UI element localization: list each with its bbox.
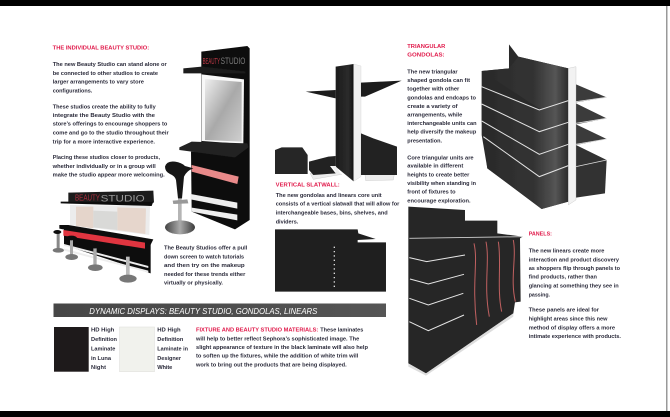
text block: triangular gondolas: together with other	[407, 87, 460, 93]
illustration: long beauty studio bar with four stools: BEAUTY	[75, 194, 101, 203]
illustration: slatwall close-up	[275, 229, 386, 292]
label: designer white: Definition	[157, 337, 184, 343]
text block: panels: passing.	[529, 292, 550, 298]
text block: triangular gondolas: create a variety of	[407, 104, 458, 110]
bottom black bar	[0, 411, 670, 417]
heading: triangular gondolas	[407, 44, 445, 59]
text block: intro: be connected to other studios to create	[53, 71, 158, 77]
illustration: single beauty studio tower with stool: STUDIO	[221, 56, 245, 66]
text block: integration: come and go to the studio throughout their	[53, 130, 169, 136]
banner: dynamic displays: DYNAMIC DISPLAYS: BEAUTY STUDIO, GONDOLAS, LINEARS	[89, 306, 318, 316]
text block: pull down screen: down screen to watch tutorials	[164, 254, 244, 260]
text block: fixture and beauty studio materials: These laminates	[320, 328, 363, 334]
swatch: designer white laminate	[120, 327, 154, 372]
text block: integration	[53, 104, 169, 145]
text block: triangular gondolas: front of fixtures to	[407, 190, 456, 196]
text block: triangular gondolas: Core triangular units are	[407, 155, 474, 161]
text block: integration: trip for a more interactive experience.	[53, 139, 155, 145]
text block: triangular gondolas: presentation.	[407, 138, 442, 144]
label: luna night: HD High	[91, 328, 115, 334]
illustration: long beauty studio bar with four stools	[53, 191, 154, 283]
illustration: long beauty studio bar with four stools: STUDIO	[101, 193, 145, 203]
text block: vertical slatwall description: consists of a vertical slatwall that will allow for	[276, 202, 400, 208]
text block: triangular gondolas: visibility when standing in	[407, 181, 476, 187]
text block: triangular gondolas: encourage exploration.	[407, 198, 471, 204]
illustration: single beauty studio tower with stool	[165, 46, 250, 234]
text block: triangular gondolas	[407, 44, 477, 204]
text block: pull down screen	[164, 246, 248, 287]
text block: placement: Placing these studios closer to products,	[53, 155, 160, 161]
illustration: triangular gondola	[482, 44, 607, 209]
label: luna night: in Luna	[91, 356, 112, 362]
text block: triangular gondolas: help diversify the makeup	[407, 130, 477, 136]
banner: dynamic displays	[54, 304, 386, 317]
swatch: luna night laminate	[54, 327, 89, 372]
text block: fixture and beauty studio materials: will help to better reflect Sephora’s sophisticated image. The	[195, 336, 359, 342]
text block: panels: glancing at something they see in	[529, 283, 619, 289]
text block: panels: method of display offers a more	[529, 325, 615, 331]
text block: intro: The new Beauty Studio can stand alone or	[53, 62, 167, 68]
text block: panels: find products, rather than	[529, 275, 598, 281]
heading: triangular gondolas: GONDOLAS:	[407, 53, 445, 59]
heading: triangular gondolas: TRIANGULAR	[407, 44, 445, 50]
text block: placement: whether individually or in a group will	[52, 164, 156, 170]
label: designer white: Designer	[157, 356, 182, 362]
label: designer white: White	[157, 365, 172, 371]
text block: placement: make the studio appear more welcoming.	[53, 173, 165, 179]
text block: pull down screen: The Beauty Studios offer a pull	[164, 246, 248, 252]
text block: integration: integrate the Beauty Studio with the	[53, 113, 155, 119]
text block: triangular gondolas: interchangeable units can	[407, 121, 477, 127]
label: luna night	[91, 328, 118, 371]
top black bar	[0, 0, 670, 6]
label: luna night: Laminate	[91, 347, 115, 353]
heading: vertical slatwall: VERTICAL SLATWALL:	[276, 183, 340, 189]
text block: panels: highlight areas since this new	[529, 317, 608, 323]
label: luna night: Night	[91, 365, 106, 371]
illustration: exploded vertical slatwall gondola	[275, 64, 402, 181]
text block: triangular gondolas: shaped gondola can fit	[407, 78, 470, 84]
text block: panels	[529, 232, 621, 340]
text block: triangular gondolas: available in different	[407, 164, 463, 170]
text block: vertical slatwall description: The new gondolas and linears core unit	[276, 193, 382, 199]
text block: fixture and beauty studio materials: work to bring out the products that are being displayed.	[195, 362, 347, 368]
text block: triangular gondolas: The new triangular	[407, 69, 458, 75]
illustration: single beauty studio tower with stool: BEAUTY	[203, 56, 220, 66]
label: designer white	[157, 328, 189, 371]
panel: individual beauty studio text	[52, 46, 169, 179]
text block: fixture and beauty studio materials: FIXTURE AND BEAUTY STUDIO MATERIALS:	[196, 328, 318, 334]
text block: intro	[53, 62, 167, 94]
text block: intro: configurations.	[53, 88, 93, 94]
illustration: linear gondola with panels	[408, 207, 523, 376]
label: luna night: Definition	[91, 337, 118, 343]
text block: vertical slatwall description: dividers.	[276, 219, 299, 225]
text block: triangular gondolas: heights to create better	[407, 172, 470, 178]
text block: panels: as shoppers flip through panels to	[529, 266, 620, 272]
text block: triangular gondolas: arrangements, while	[407, 112, 462, 118]
label: designer white: HD High	[157, 328, 181, 334]
label: designer white: Laminate in	[157, 347, 189, 353]
text block: panels: intimate experience with products.	[529, 334, 621, 340]
text block: panels: interaction and product discovery	[529, 257, 620, 263]
text block: fixture and beauty studio materials	[195, 328, 369, 368]
text block: pull down screen: needed for these trends either	[164, 272, 246, 278]
text block: fixture and beauty studio materials: to soften up the fixtures, while the addition of white trim will	[196, 354, 359, 360]
text block: panels: These panels are ideal for	[529, 308, 600, 314]
text block: pull down screen: virtually or physically.	[164, 281, 223, 287]
text block: integration: store’s offerings to encourage shoppers to	[53, 122, 168, 128]
text block: triangular gondolas: gondolas and endcaps to	[407, 95, 477, 101]
text block: intro: larger arrangements to vary store	[53, 80, 144, 86]
text block: vertical slatwall description: interchangeable bases, bins, shelves, and	[276, 210, 388, 216]
heading: the individual beauty studio: THE INDIVIDUAL BEAUTY STUDIO:	[53, 46, 149, 52]
text block: placement	[52, 155, 165, 179]
text block: integration: These studios create the ability to fully	[53, 104, 157, 110]
heading: panels: PANELS:	[529, 232, 552, 238]
text block: vertical slatwall description	[276, 193, 400, 225]
text block: fixture and beauty studio materials: slight appearance of texture in the black laminate will also help	[196, 345, 369, 351]
text block: panels: The new linears create more	[529, 248, 604, 254]
text block: pull down screen: and then try on the makeup	[164, 263, 245, 269]
